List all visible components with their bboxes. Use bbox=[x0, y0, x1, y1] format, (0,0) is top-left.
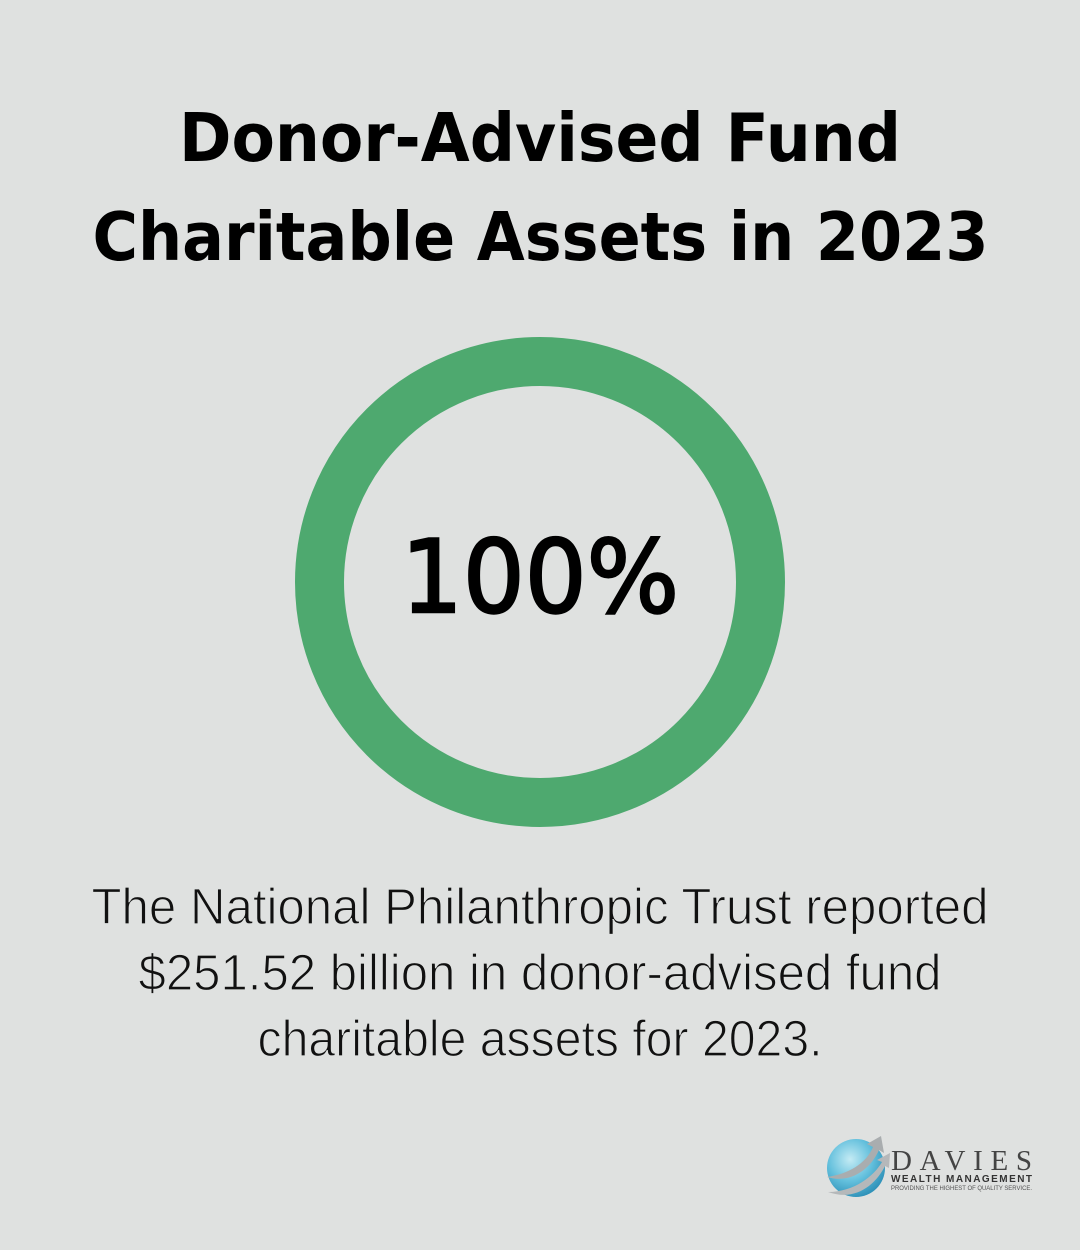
description text: charitable assets for 2023. bbox=[258, 1010, 822, 1067]
description text: $251.52 billion in donor-advised fund bbox=[138, 944, 942, 1001]
logo wordmark: DAVIES bbox=[891, 1145, 1032, 1177]
logo wordmark: PROVIDING THE HIGHEST OF QUALITY SERVICE. bbox=[891, 1185, 1032, 1192]
title: Donor-Advised Fund bbox=[179, 99, 901, 177]
logo wordmark bbox=[891, 1145, 1032, 1192]
title: Charitable Assets in 2023 bbox=[92, 198, 988, 276]
title bbox=[92, 99, 988, 276]
description text: The National Philanthropic Trust reported bbox=[92, 878, 988, 935]
description text bbox=[92, 878, 988, 1067]
donut chart bbox=[295, 337, 785, 827]
logo wordmark: WEALTH MANAGEMENT bbox=[891, 1174, 1032, 1185]
percentage value: 100% bbox=[401, 518, 679, 636]
icon: globe bbox=[827, 1136, 890, 1197]
logo bbox=[827, 1136, 1032, 1197]
